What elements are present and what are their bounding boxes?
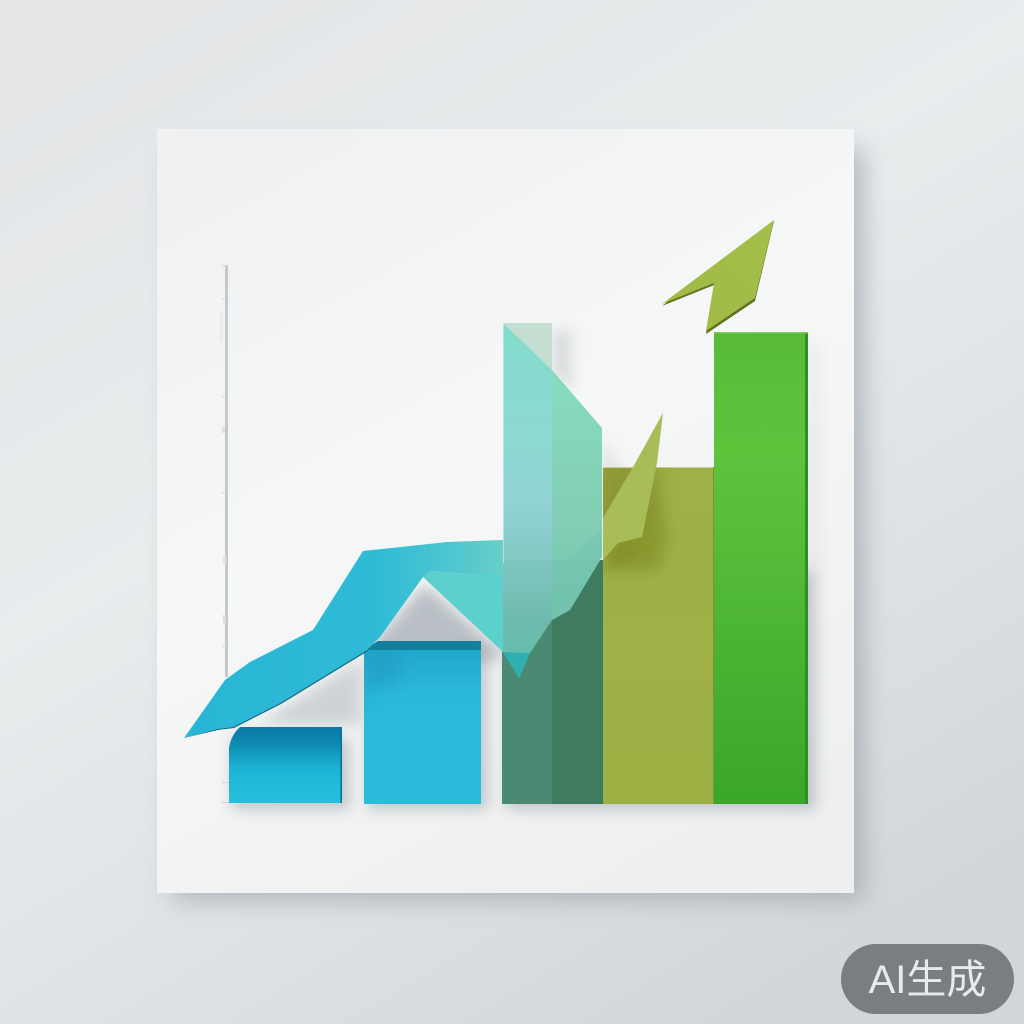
bar 5: green xyxy=(714,332,808,804)
bar 3: translucent glass sheet xyxy=(503,323,602,678)
badge: AI generated: AI生成 xyxy=(869,958,986,1002)
panel: white card xyxy=(157,129,854,893)
ribbon: olive fin xyxy=(603,413,664,560)
bar 2: blue tall xyxy=(364,641,481,804)
ribbon: blue trend xyxy=(184,540,503,738)
bar 3 upper background xyxy=(503,323,552,372)
arrow: green head top xyxy=(662,220,774,334)
y axis xyxy=(220,265,229,803)
bar 1: blue small xyxy=(229,727,342,803)
chart: bars and trend ribbon xyxy=(184,220,816,810)
bar shadows xyxy=(232,330,816,810)
panel shadow xyxy=(172,148,864,900)
badge: AI generated xyxy=(841,944,1014,1014)
bar 3: dark green xyxy=(502,560,603,804)
bar 4: olive xyxy=(603,467,714,804)
